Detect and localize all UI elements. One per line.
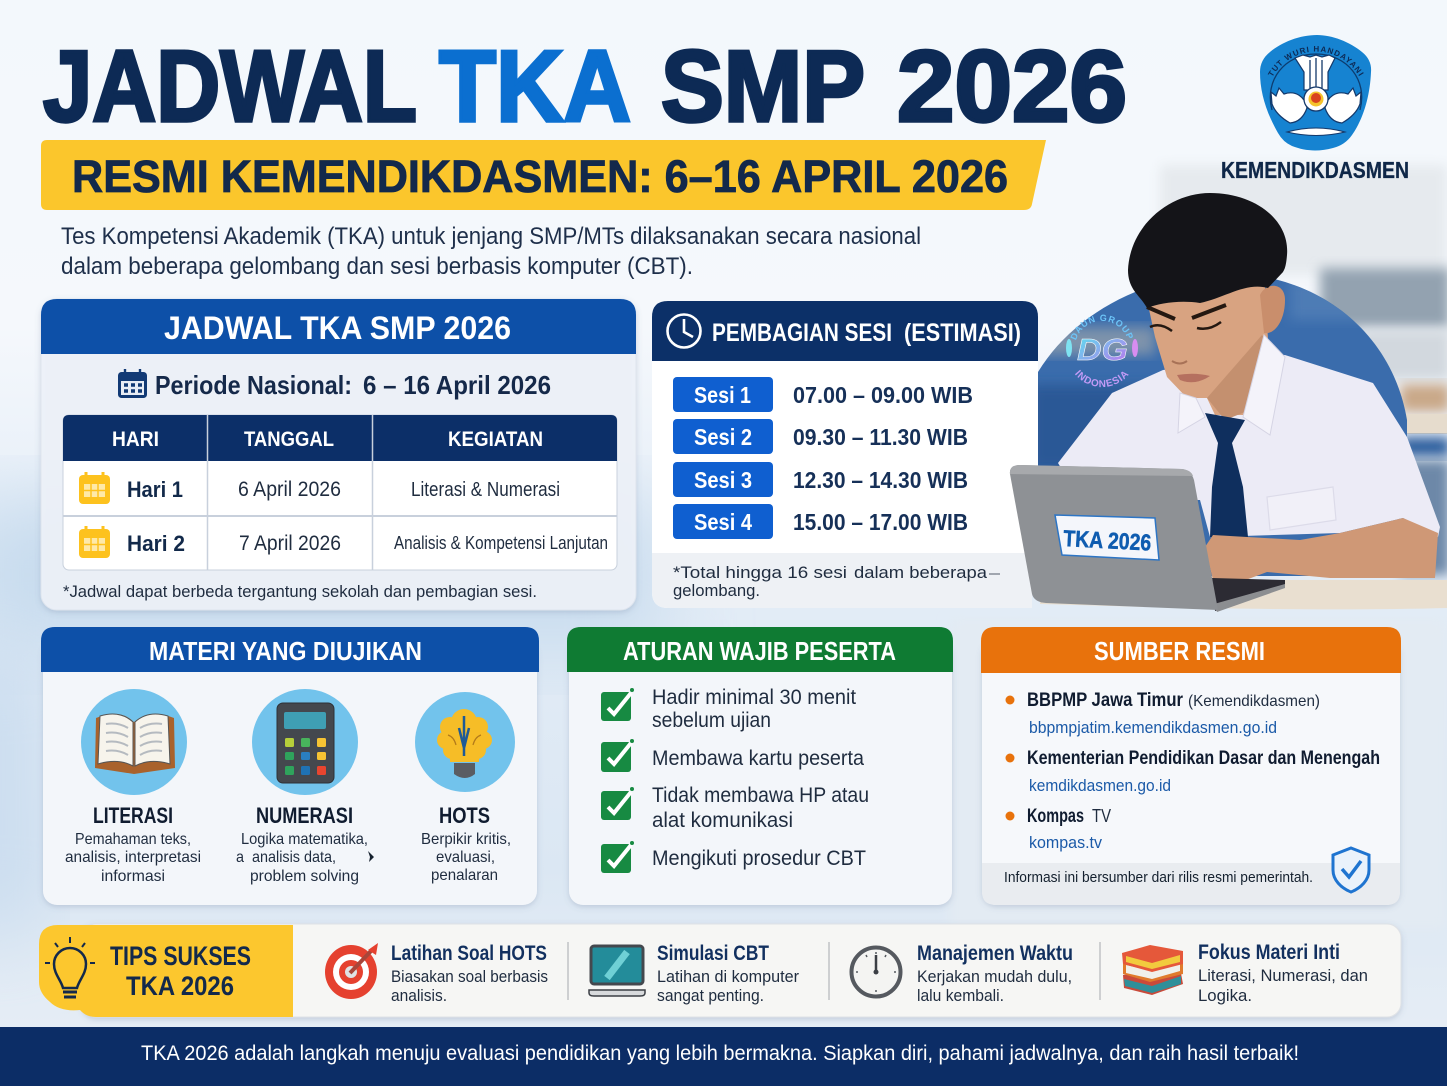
- HOTS: [415, 692, 515, 884]
- panel: mandatory rules: [567, 627, 953, 905]
- tip: core material: Logika.: [1198, 986, 1252, 1005]
- source 1: BBPMP Jawa Timur: [1027, 690, 1184, 711]
- session 1: [673, 377, 973, 412]
- tips label: [39, 925, 293, 1017]
- tip: CBT simulation: [589, 942, 799, 1005]
- row: day 2: Hari 2: [127, 531, 185, 556]
- session 4: 15.00 – 17.00 WIB: [793, 509, 968, 535]
- session footnote: dalam beberapa: [854, 563, 988, 582]
- shirt: [1058, 355, 1440, 537]
- tip: HOTS practice: Biasakan soal berbasis: [391, 967, 548, 986]
- row: day 1: Hari 1: [127, 477, 183, 502]
- schedule table: TANGGAL: [244, 428, 334, 451]
- schedule table: [63, 415, 617, 570]
- session 4: [673, 504, 968, 539]
- source 2: [1006, 748, 1380, 795]
- logo: DG Daun Group watermark: DG: [1077, 332, 1128, 367]
- footer banner: TKA 2026 adalah langkah menuju evaluasi pendidikan yang lebih bermakna. Siapkan diri, pahami jadwalnya, dan raih hasil terbaik!: [141, 1042, 1299, 1065]
- session 1: 07.00 – 09.00 WIB: [793, 382, 973, 408]
- rule 3: Tidak membawa HP atau: [652, 784, 869, 807]
- source 1: (Kemendikdasmen): [1188, 693, 1320, 710]
- rule 1: sebelum ujian: [652, 709, 771, 732]
- session 2: Sesi 2: [694, 424, 752, 450]
- tip: CBT simulation: Simulasi CBT: [657, 942, 769, 965]
- tip: time management: lalu kembali.: [917, 986, 1004, 1005]
- title: TKA: [439, 31, 631, 143]
- tip: HOTS practice: [325, 942, 548, 1005]
- row: day 2: [79, 526, 608, 558]
- subtitle banner: RESMI KEMENDIKDASMEN: 6–16 APRIL 2026: [72, 151, 1008, 202]
- laptop lid: [1010, 465, 1218, 610]
- HOTS: HOTS: [439, 803, 490, 828]
- tip: HOTS practice: Latihan Soal HOTS: [391, 942, 547, 965]
- HOTS: evaluasi,: [436, 849, 495, 866]
- tie: [1205, 413, 1248, 537]
- national period: 6 – 16 April 2026: [363, 370, 551, 400]
- rule 3: [601, 784, 869, 832]
- panel: session split: [652, 301, 1038, 608]
- tip: core material: Fokus Materi Inti: [1198, 941, 1340, 964]
- title: SMP: [661, 31, 865, 143]
- source 2: kemdikdasmen.go.id: [1029, 776, 1171, 795]
- session header: [652, 301, 1038, 361]
- national period: Periode Nasional:: [155, 370, 352, 400]
- tip: core material: [1122, 941, 1368, 1005]
- panel: tested material: MATERI YANG DIUJIKAN: [149, 636, 422, 666]
- schedule table: KEGIATAN: [448, 428, 543, 451]
- session 4: Sesi 4: [694, 509, 752, 535]
- HOTS: penalaran: [431, 867, 498, 884]
- title: 2026: [897, 31, 1127, 143]
- source 1: bbpmpjatim.kemendikdasmen.go.id: [1029, 718, 1277, 737]
- panel: official sources: [981, 627, 1401, 905]
- laptop base: [1212, 578, 1285, 611]
- session 2: 09.30 – 11.30 WIB: [793, 424, 968, 450]
- schedule header: JADWAL TKA SMP 2026: [164, 310, 511, 346]
- numeracy: Logika matematika,: [241, 831, 368, 848]
- source 3: TV: [1092, 806, 1111, 826]
- laptop sticker: [1055, 515, 1159, 560]
- source 3: [1006, 806, 1111, 852]
- sources footnote: [982, 863, 1400, 905]
- logo: DG Daun Group watermark: [1066, 314, 1138, 388]
- row: day 1: 6 April 2026: [238, 478, 341, 501]
- hair: [1128, 193, 1287, 308]
- logo: DG Daun Group watermark: DAUN GROUP: [1070, 314, 1133, 340]
- numeracy: a: [236, 849, 244, 866]
- session 1: Sesi 1: [694, 382, 751, 408]
- logo: DG Daun Group watermark: INDONESIA: [1075, 370, 1129, 388]
- literacy: informasi: [101, 868, 165, 885]
- tips label: TKA 2026: [126, 971, 234, 1001]
- rule 2: [601, 739, 864, 772]
- tips bar: [39, 924, 1401, 1017]
- source 2: Kementerian Pendidikan Dasar dan Menengah: [1027, 748, 1380, 769]
- illustration: student with laptop: [1010, 193, 1447, 612]
- tip: CBT simulation: Latihan di komputer: [657, 967, 799, 986]
- literacy: analisis, interpretasi: [65, 849, 201, 866]
- source 3: Kompas: [1027, 806, 1084, 827]
- tip: CBT simulation: sangat penting.: [657, 986, 764, 1005]
- session 3: 12.30 – 14.30 WIB: [793, 467, 968, 493]
- tips label: TIPS SUKSES: [110, 941, 251, 971]
- panel: official sources: SUMBER RESMI: [1094, 636, 1265, 666]
- desk: [1040, 580, 1447, 609]
- session footnote: gelombang.: [673, 581, 760, 600]
- title: JADWAL: [43, 31, 417, 143]
- footer banner: [0, 1027, 1447, 1086]
- intro text: Tes Kompetensi Akademik (TKA) untuk jenjang SMP/MTs dilaksanakan secara nasional: [61, 223, 921, 250]
- rule 4: Mengikuti prosedur CBT: [652, 847, 866, 870]
- arm and hand: [1205, 518, 1438, 587]
- numeracy: [236, 689, 374, 885]
- row: day 2: 7 April 2026: [239, 532, 341, 555]
- logo: Kemendikdasmen: [1221, 35, 1409, 183]
- session 2: [673, 419, 968, 454]
- logo: Kemendikdasmen: KEMENDIKDASMEN: [1221, 157, 1409, 183]
- intro text: [61, 223, 921, 280]
- neck and face: [1147, 270, 1268, 415]
- schedule header: [41, 299, 636, 354]
- literacy: [65, 689, 201, 885]
- panel: tested material: [41, 627, 539, 905]
- tip: time management: Manajemen Waktu: [917, 942, 1073, 965]
- blue arch backdrop: [1038, 280, 1407, 576]
- HOTS: Berpikir kritis,: [421, 831, 511, 848]
- tip: core material: Literasi, Numerasi, dan: [1198, 966, 1368, 985]
- rule 1: [601, 686, 856, 732]
- numeracy: problem solving: [250, 868, 359, 885]
- tip: time management: Kerjakan mudah dulu,: [917, 967, 1072, 986]
- session 3: Sesi 3: [694, 467, 752, 493]
- row: day 2: Analisis & Kompetensi Lanjutan: [394, 533, 608, 553]
- panel: mandatory rules: ATURAN WAJIB PESERTA: [623, 636, 896, 666]
- rule 3: alat komunikasi: [652, 809, 793, 832]
- numeracy: NUMERASI: [256, 803, 353, 828]
- schedule footnote: *Jadwal dapat berbeda tergantung sekolah dan pembagian sesi.: [63, 582, 537, 601]
- numeracy: analisis data,: [252, 849, 336, 866]
- icon: shield: [1333, 848, 1369, 892]
- source 1: [1006, 690, 1320, 737]
- row: day 1: [79, 472, 560, 504]
- rule 4: [601, 841, 866, 873]
- literacy: LITERASI: [93, 803, 173, 828]
- tip: time management: [852, 942, 1073, 1005]
- national period: [155, 370, 551, 400]
- rule 1: Hadir minimal 30 menit: [652, 686, 856, 709]
- schedule table: HARI: [112, 428, 159, 451]
- title: [43, 31, 1127, 143]
- session 3: [673, 462, 968, 497]
- session footnote: *Total hingga 16 sesi: [673, 563, 847, 582]
- intro text: dalam beberapa gelombang dan sesi berbasis komputer (CBT).: [61, 253, 693, 280]
- rule 2: Membawa kartu peserta: [652, 747, 864, 770]
- session header: (ESTIMASI): [904, 319, 1021, 347]
- tip: HOTS practice: analisis.: [391, 986, 447, 1005]
- session header: PEMBAGIAN SESI: [712, 319, 892, 347]
- panel: schedule: [41, 299, 636, 610]
- row: day 1: Literasi & Numerasi: [411, 479, 560, 501]
- collar: [1178, 393, 1205, 433]
- source 3: kompas.tv: [1029, 833, 1102, 852]
- sources footnote: Informasi ini bersumber dari rilis resmi pemerintah.: [1004, 870, 1313, 886]
- logo: Kemendikdasmen: TUT WURI HANDAYANI: [1268, 46, 1364, 76]
- laptop sticker: TKA 2026: [1063, 525, 1152, 556]
- literacy: Pemahaman teks,: [75, 831, 191, 848]
- icon: calendar: [118, 369, 147, 398]
- session footnote: [673, 563, 1000, 600]
